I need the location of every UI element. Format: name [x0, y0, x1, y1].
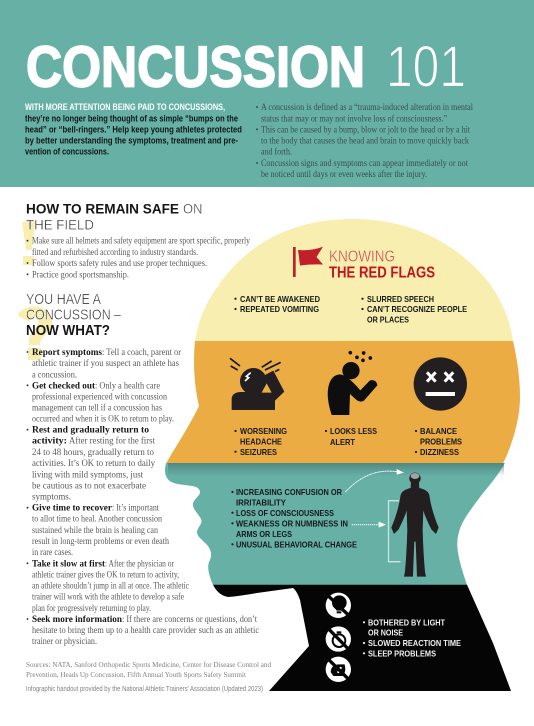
concussion definition bullets — [256, 102, 473, 179]
cognitive symptoms: BOTHERED BY LIGHT — [368, 618, 445, 627]
list item: rest and gradually return — [27, 425, 155, 502]
list item: rest and gradually return: living with mild symptoms, just — [32, 469, 143, 479]
safety tips list: Make sure all helmets and safety equipment are sport specific, properly — [32, 236, 250, 246]
concussion definition bullets: A concussion is defined as a “trauma-induced alteration in mental — [261, 102, 473, 112]
arrow: to body — [352, 522, 386, 528]
list item: give time to recover: to allot time to heal. Another concussion — [32, 514, 162, 524]
intro text: they’re no longer being thought of as simple “bumps on the — [25, 113, 238, 123]
concussion definition bullets: status that may or may not involve loss of consciousness.” — [261, 113, 447, 123]
neurological symptoms: INCREASING CONFUSION OR — [236, 488, 342, 497]
cognitive symptoms — [363, 618, 461, 658]
concussion definition bullets: be noticed until days or even weeks after the injury. — [261, 169, 427, 179]
arrow: to brain — [345, 469, 404, 492]
cognitive symptoms: SLOWED REACTION TIME — [368, 639, 461, 648]
list item: take it slow — [27, 558, 189, 613]
body bracket — [388, 501, 400, 562]
list item: get checked out — [27, 380, 174, 424]
panel: knowing the red flags (yellow) — [195, 219, 513, 342]
list item: take it slow: an athlete shouldn’t jump in all at once. The athletic — [32, 580, 189, 590]
panel: orange band — [166, 341, 520, 464]
sources: Sources: NATA, Sanford Orthopedic Sports Medicine, Center for Disease Control and — [26, 660, 271, 669]
list item: rest and gradually return: After resting for the first — [69, 436, 155, 446]
list item: take it slow: : After the physician or — [105, 558, 174, 568]
icon: yellow exclamation mark — [22, 221, 35, 265]
list item: get checked out: management can tell if a concussion has — [32, 403, 162, 413]
balance symptoms: PROBLEMS — [420, 438, 462, 447]
heading: knowing the red flags: KNOWING — [329, 249, 395, 266]
handout credit: Infographic handout provided by the National Athletic Trainers’ Association (Updated 2023) — [26, 686, 263, 693]
panel: teal band — [165, 463, 505, 585]
icon: yellow question mark — [18, 307, 52, 360]
list item: seek more information — [27, 614, 259, 646]
list item: report symptoms — [27, 347, 181, 379]
alertness symptoms: LOOKS LESS — [330, 427, 377, 436]
list item: give time to recover: result in long-term problems or even death — [32, 536, 169, 546]
head graphic — [165, 219, 520, 691]
list item: rest and gradually return: be cautious as to not exacerbate — [32, 480, 146, 490]
concussion definition bullets: This can be caused by a bump, blow or jolt to the head or by a hit — [261, 124, 470, 134]
red flag symptoms right: SLURRED SPEECH — [367, 295, 434, 304]
what to do list — [27, 347, 259, 646]
heading: you have a concussion — [26, 292, 122, 339]
intro text: WITH MORE ATTENTION BEING PAID TO CONCUSSIONS, — [25, 102, 225, 112]
heading: how to remain safe: ON — [183, 202, 202, 218]
red flag symptoms left: CAN’T BE AWAKENED — [240, 295, 320, 304]
concussion definition bullets: to the body that causes the head and brain to move quickly back — [261, 136, 469, 146]
intro text: vention of concussions. — [25, 147, 109, 157]
neurological symptoms: ARMS OR LEGS — [236, 530, 292, 539]
intro text — [25, 102, 242, 157]
concussion definition bullets: and forth. — [261, 147, 292, 157]
headache symptoms: SEIZURES — [240, 448, 277, 457]
intro text: by better understanding the symptoms, treatment and pre- — [25, 136, 238, 146]
headache symptoms — [234, 427, 287, 457]
list item: take it slow: plan for progressively returning to play. — [32, 603, 151, 613]
list item: get checked out: professional experienced with concussion — [32, 391, 167, 401]
red flag symptoms right: OR PLACES — [367, 315, 409, 324]
icon: dizzy face — [414, 357, 467, 411]
list item: give time to recover: in rare cases. — [32, 547, 73, 557]
neurological symptoms: IRRITABILITY — [236, 498, 287, 507]
alertness symptoms: ALERT — [330, 438, 355, 447]
list item: rest and gradually return: 24 to 48 hours, gradually return to — [32, 447, 154, 457]
heading: how to remain safe: HOW TO REMAIN SAFE — [26, 202, 179, 218]
concussion definition bullets: Concussion signs and symptoms can appear immediately or not — [261, 158, 468, 168]
list item: rest and gradually return: activities. It’s OK to return to daily — [32, 458, 155, 468]
neurological symptoms: WEAKNESS OR NUMBNESS IN — [236, 519, 348, 528]
list item: give time to recover: Give time to recover — [32, 503, 112, 513]
neurological symptoms: UNUSUAL BEHAVIORAL CHANGE — [236, 540, 357, 549]
cognitive symptoms: SLEEP PROBLEMS — [368, 649, 436, 658]
list item: report symptoms: : Tell a coach, parent or — [102, 347, 181, 357]
balance symptoms: DIZZINESS — [420, 448, 459, 457]
alertness symptoms — [325, 427, 377, 447]
safety tips list — [27, 236, 250, 279]
list item: take it slow: trainer will work with the athlete to develop a safe — [32, 592, 184, 602]
red flag symptoms left — [234, 295, 320, 314]
balance symptoms — [415, 427, 462, 457]
list item: report symptoms: athletic trainer if you suspect an athlete has — [32, 358, 179, 368]
list item: give time to recover: : It’s important — [112, 503, 159, 513]
heading: how to remain safe — [26, 202, 202, 234]
safety tips list: Practice good sportsmanship. — [32, 269, 129, 279]
list item: take it slow: athletic trainer gives the OK to return to activity, — [32, 569, 179, 579]
list item: seek more information: Seek more information — [32, 614, 122, 624]
safety tips list: fitted and refurbished according to industry standards. — [32, 247, 198, 257]
headache symptoms: HEADACHE — [240, 437, 282, 446]
title: CONCUSSION — [26, 36, 365, 100]
icon: no sleep — [326, 657, 351, 682]
list item: get checked out: Get checked out — [32, 380, 95, 390]
icon: dazed figure — [328, 351, 377, 415]
list item: take it slow: Take it slow at first — [32, 558, 105, 568]
icon: no stopwatch — [326, 626, 351, 652]
list item: report symptoms: Report symptoms — [32, 347, 103, 357]
list item: get checked out: : Only a health care — [95, 380, 160, 390]
sources: Prevention, Heads Up Concussion, Fifth Annual Youth Sports Safety Summit — [26, 670, 247, 679]
heading: knowing the red flags: THE RED FLAGS — [329, 264, 435, 281]
red flag symptoms right: CAN’T RECOGNIZE PEOPLE — [367, 305, 467, 314]
list item: rest and gradually return: symptoms. — [32, 492, 71, 502]
heading: you have a concussion: CONCUSSION – — [26, 308, 122, 324]
icon: headache figure — [230, 358, 284, 410]
list item: report symptoms: a concussion. — [32, 369, 77, 379]
list item: seek more information: hesitate to bring them up to a health care provider such as an athletic — [32, 625, 259, 635]
sources — [26, 660, 271, 679]
safety tips list: Follow sports safety rules and use proper techniques. — [32, 258, 207, 268]
neurological symptoms: LOSS OF CONSCIOUSNESS — [236, 509, 334, 518]
neurological symptoms — [231, 488, 357, 549]
list item: rest and gradually return: Rest and gradually return to — [32, 425, 150, 435]
intro text: head” or “bell-ringers.” Help keep young athletes protected — [25, 124, 242, 134]
list item: get checked out: occurred and when it is OK to return to play. — [32, 414, 174, 424]
list item: give time to recover: sustained while the brain is healing can — [32, 525, 158, 535]
icon: no light — [326, 593, 351, 618]
red flag symptoms right — [361, 295, 467, 324]
heading: how to remain safe: THE FIELD — [26, 218, 94, 234]
list item: seek more information: trainer or physician. — [32, 636, 97, 646]
heading: you have a concussion: YOU HAVE A — [26, 292, 101, 308]
heading: you have a concussion: NOW WHAT? — [26, 323, 110, 339]
cognitive symptoms: OR NOISE — [368, 629, 403, 638]
panel: header — [0, 0, 534, 187]
title: 101 — [386, 34, 466, 100]
balance symptoms: BALANCE — [420, 427, 457, 436]
list item: seek more information: : If there are concerns or questions, don’t — [122, 614, 257, 624]
panel: black band — [213, 585, 511, 691]
headache symptoms: WORSENING — [240, 427, 287, 436]
red flag symptoms left: REPEATED VOMITING — [240, 305, 319, 314]
icon: red flag — [293, 247, 323, 277]
heading: knowing the red flags — [329, 249, 435, 281]
icon: human body silhouette — [391, 473, 439, 577]
list item: give time to recover — [27, 503, 169, 557]
list item: rest and gradually return: activity: — [32, 436, 67, 446]
